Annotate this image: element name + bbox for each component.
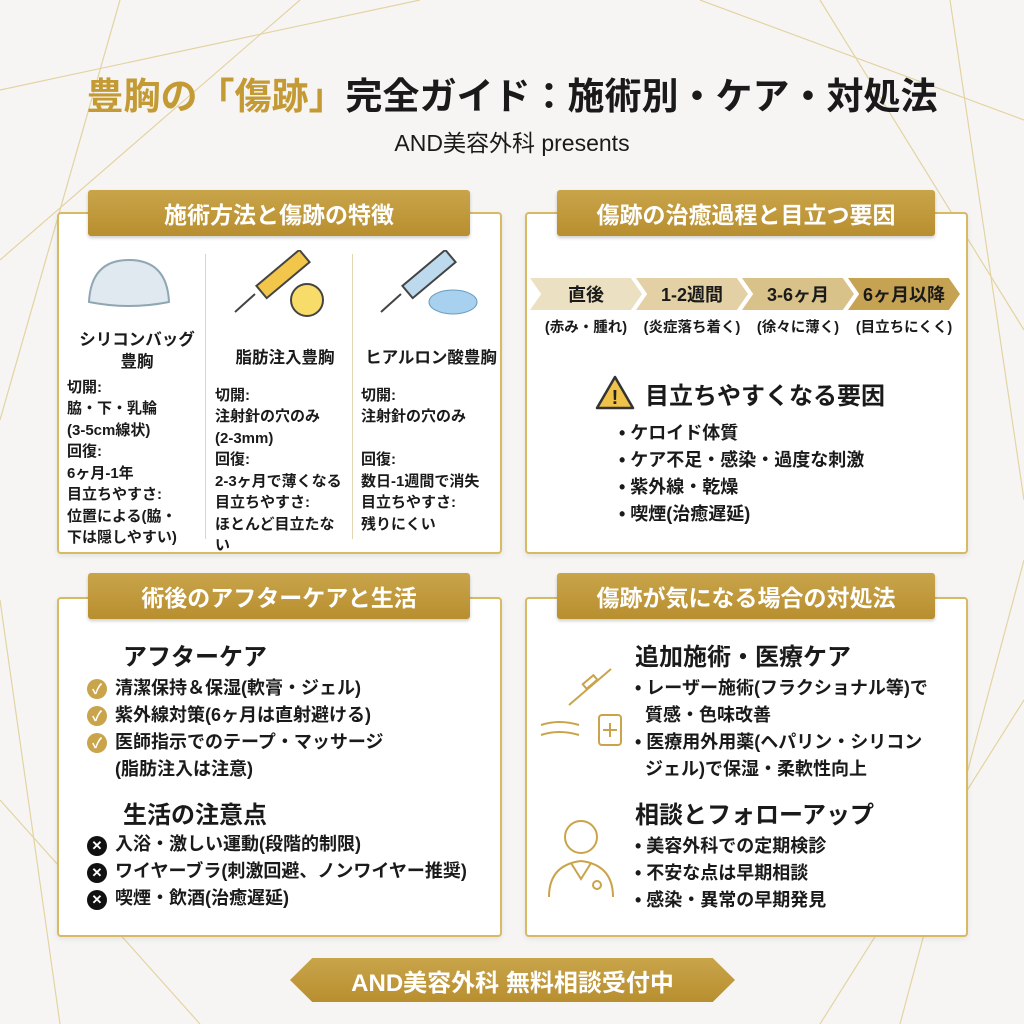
panel: aftercare: 紫外線対策(6ヶ月は直射避ける) <box>115 705 371 725</box>
title: 豊胸の「傷跡」完全ガイド：施術別・ケア・対処法 <box>86 76 938 117</box>
tab: aftercare: 術後のアフターケアと生活 <box>141 585 417 611</box>
tab: aftercare <box>88 573 470 619</box>
column: hyaluronic: 回復: <box>361 451 396 468</box>
footer banner: AND美容外科 無料相談受付中 <box>351 970 674 996</box>
factors <box>596 376 885 524</box>
tab: remedies: 傷跡が気になる場合の対処法 <box>596 585 896 611</box>
text: 直後 <box>568 285 604 305</box>
column: silicone: シリコンバッグ <box>79 330 195 348</box>
panel: methods <box>57 212 502 554</box>
text: • ケロイド体質 <box>619 423 738 443</box>
icon: implant <box>88 259 170 307</box>
panel: aftercare: 喫煙・飲酒(治癒遅延) <box>115 888 289 908</box>
panel: remedies: 追加施術・医療ケア <box>635 644 851 671</box>
column: silicone: 脇・下・乳輪 <box>67 400 157 417</box>
panel: aftercare: ✓ <box>92 735 102 751</box>
panel: aftercare: ✓ <box>92 681 102 697</box>
panel: remedies: ジェル)で保湿・柔軟性向上 <box>645 759 867 779</box>
panel: aftercare: (脂肪注入は注意) <box>115 759 253 779</box>
panel: remedies: 質感・色味改善 <box>645 705 771 725</box>
column: fat: 注射針の穴のみ <box>215 408 320 425</box>
tab: healing <box>557 190 935 236</box>
panel: aftercare: アフターケア <box>123 644 267 671</box>
panel: aftercare: ✕ <box>92 865 102 880</box>
column: fat: 2-3ヶ月で薄くなる <box>215 472 342 490</box>
panel: remedies <box>525 597 968 937</box>
column: hyaluronic: 切開: <box>361 386 396 404</box>
panel: aftercare: 生活の注意点 <box>123 802 267 829</box>
column: hyaluronic: 残りにくい <box>361 516 436 532</box>
text: (炎症落ち着く) <box>644 320 740 336</box>
column: hyaluronic: ヒアルロン酸豊胸 <box>365 348 497 366</box>
text: 目立ちやすくなる要因 <box>645 383 885 410</box>
tab: healing: 傷跡の治癒過程と目立つ要因 <box>596 202 896 228</box>
panel: aftercare <box>57 597 502 937</box>
panel: aftercare: 医師指示でのテープ・マッサージ <box>115 732 384 752</box>
panel: aftercare: 清潔保持＆保湿(軟膏・ジェル) <box>115 678 361 698</box>
column: hyaluronic: 目立ちやすさ: <box>361 494 456 511</box>
text: (赤み・腫れ) <box>545 320 627 336</box>
icon: warning <box>596 376 634 410</box>
panel: remedies: • レーザー施術(フラクショナル等)で <box>635 678 928 698</box>
panel: remedies: 相談とフォローアップ <box>635 802 874 829</box>
column: fat <box>215 250 342 554</box>
column: silicone: 目立ちやすさ: <box>67 486 162 503</box>
column: fat: 目立ちやすさ: <box>215 494 310 511</box>
panel: aftercare: ✓ <box>92 708 102 724</box>
column: hyaluronic: 数日-1週間で消失 <box>361 472 479 490</box>
text: • 喫煙(治癒遅延) <box>619 504 750 524</box>
panel: remedies: • 感染・異常の早期発見 <box>635 890 826 910</box>
panel: aftercare: 入浴・激しい運動(段階的制限) <box>115 834 361 854</box>
column: silicone: 切開: <box>67 378 102 396</box>
column: fat: 脂肪注入豊胸 <box>236 348 334 366</box>
footer banner <box>290 958 735 1002</box>
panel: aftercare: ワイヤーブラ(刺激回避、ノンワイヤー推奨) <box>115 861 467 881</box>
column: silicone: 回復: <box>67 443 102 460</box>
column: fat: (2-3mm) <box>215 430 273 446</box>
text: • 紫外線・乾燥 <box>619 477 738 497</box>
column: hyaluronic <box>361 250 497 532</box>
icon: laser <box>540 668 622 746</box>
tab: methods <box>88 190 470 236</box>
icon: warning: ! <box>612 387 618 409</box>
icon: syringe fat <box>234 250 324 317</box>
text: (徐々に薄く) <box>757 320 839 336</box>
panel: aftercare: ✕ <box>92 892 102 907</box>
panel: remedies: • 不安な点は早期相談 <box>635 863 808 883</box>
column: silicone: 6ヶ月-1年 <box>67 464 134 482</box>
column: fat: 切開: <box>215 386 250 404</box>
column: silicone <box>67 259 195 546</box>
text: (目立ちにくく) <box>856 320 952 336</box>
text: 3-6ヶ月 <box>767 285 829 305</box>
text: • ケア不足・感染・過度な刺激 <box>619 450 864 470</box>
column: fat: ほとんど目立たな <box>215 516 335 532</box>
panel: remedies: • 医療用外用薬(ヘパリン・シリコン <box>635 732 922 752</box>
column: fat: 回復: <box>215 451 250 468</box>
column: fat: い <box>215 537 230 554</box>
tab: methods: 施術方法と傷跡の特徴 <box>164 202 394 228</box>
icon: doctor <box>548 820 614 897</box>
column: hyaluronic: 注射針の穴のみ <box>361 408 466 425</box>
text: 6ヶ月以降 <box>863 285 945 305</box>
column: silicone: 位置による(脇・ <box>67 508 177 524</box>
panel: aftercare: ✕ <box>92 838 102 853</box>
column: silicone: 豊胸 <box>120 352 154 370</box>
panel: healing <box>525 212 968 554</box>
icon: syringe gel <box>380 250 478 314</box>
panel: remedies: • 美容外科での定期検診 <box>635 836 826 856</box>
text: 1-2週間 <box>661 285 723 305</box>
timeline <box>530 278 960 336</box>
column: silicone: (3-5cm線状) <box>67 422 150 438</box>
tab: remedies <box>557 573 935 619</box>
column: silicone: 下は隠しやすい) <box>67 529 177 546</box>
subtitle: AND美容外科 presents <box>394 130 630 156</box>
